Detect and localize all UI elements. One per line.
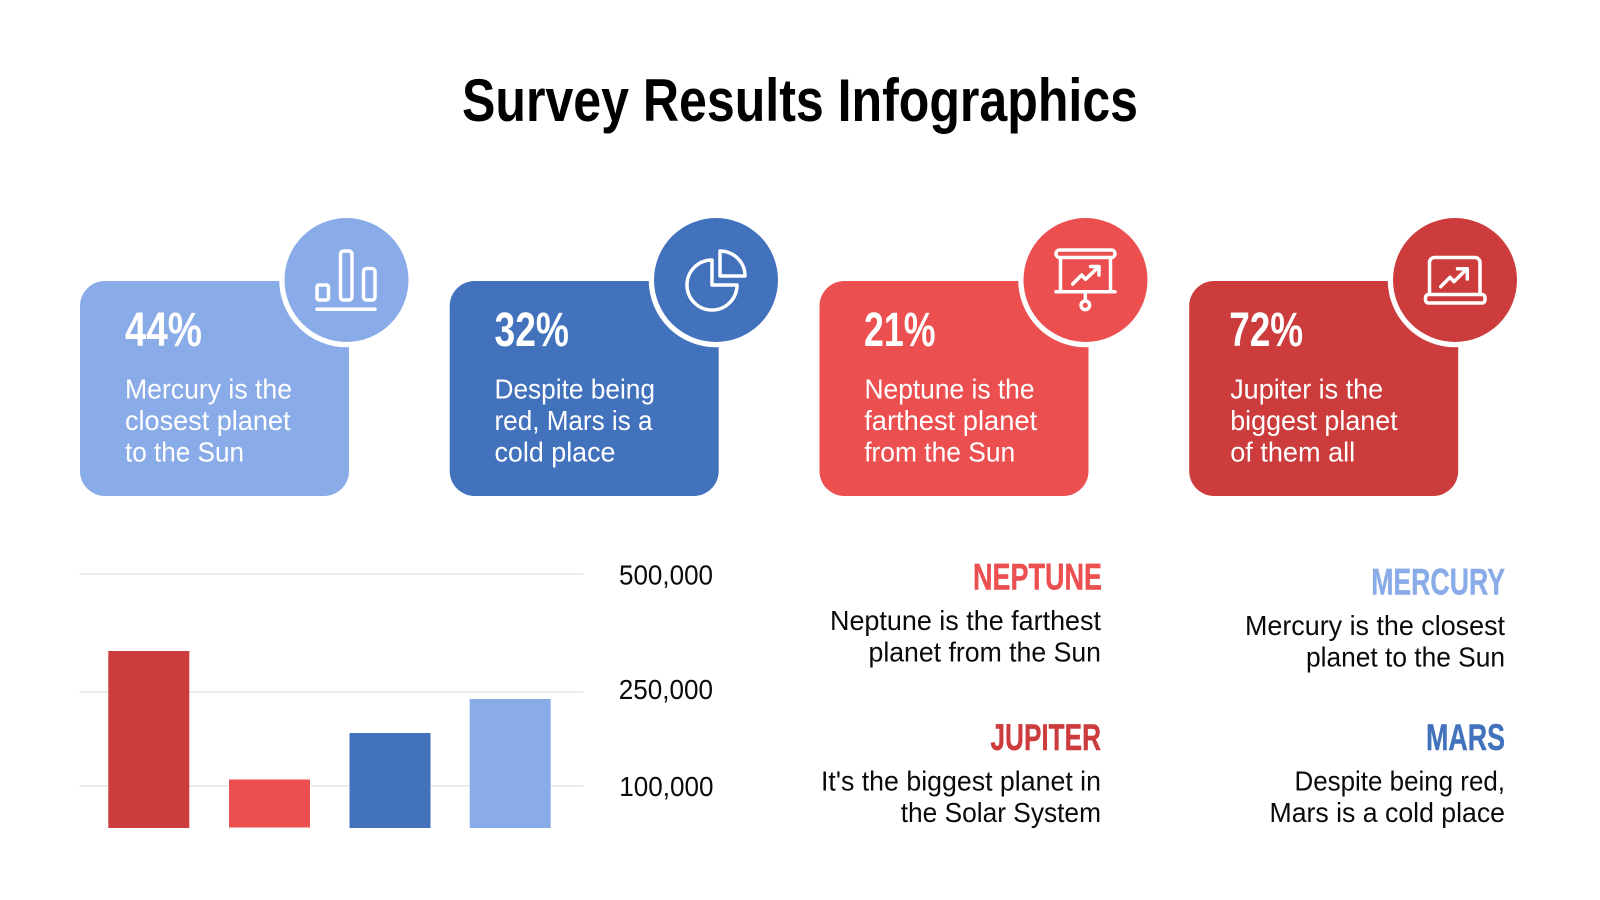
axis label 100,000: 100,000: [619, 771, 714, 802]
description: the Solar System: [901, 797, 1101, 828]
axis label 250,000: 250,000: [619, 674, 713, 705]
description: Mercury is the closest: [1245, 610, 1505, 641]
description: from the Sun: [864, 436, 1015, 468]
bar: Neptune: [229, 780, 310, 828]
legend block: Mercury: [1245, 562, 1505, 673]
heading: MARS: [1426, 717, 1505, 758]
description: [1245, 610, 1505, 673]
circle cut-out ring: [279, 213, 414, 347]
bar: Jupiter: [108, 651, 189, 828]
description: [864, 373, 1037, 468]
percentage: 72%: [1229, 304, 1303, 357]
heading: NEPTUNE: [973, 556, 1102, 598]
panel: Jupiter 72%: [1189, 213, 1522, 496]
legend block: Jupiter: [821, 717, 1101, 828]
icon badge: laptop: [1393, 218, 1517, 342]
description: [125, 373, 292, 468]
description: Despite being: [494, 373, 655, 404]
circle cut-out ring: [1388, 213, 1522, 347]
card background: [450, 281, 719, 496]
circle cut-out ring: [1018, 213, 1153, 347]
description: [1270, 765, 1505, 828]
description: Mars is a cold place: [1270, 797, 1505, 828]
description: Mercury is the: [125, 373, 292, 404]
title: Survey Results Infographics: [462, 67, 1138, 134]
icon badge: bar chart: [284, 218, 408, 342]
description: cold place: [494, 436, 616, 468]
card background: [1189, 281, 1458, 496]
circle cut-out ring: [649, 213, 783, 347]
heading: MERCURY: [1371, 562, 1505, 602]
description: biggest planet: [1230, 405, 1398, 436]
description: [830, 605, 1101, 668]
axis label 500,000: 500,000: [619, 560, 713, 590]
icon badge: pie chart: [654, 218, 778, 342]
description: to the Sun: [125, 436, 244, 468]
panel: Mercury 44%: [80, 213, 414, 496]
description: Neptune is the farthest: [830, 605, 1101, 636]
description: farthest planet: [864, 405, 1037, 436]
description: planet from the Sun: [868, 637, 1101, 668]
panel: Neptune 21%: [820, 213, 1153, 496]
bar: Mercury: [470, 699, 551, 828]
description: red, Mars is a: [494, 405, 653, 436]
card background: [820, 281, 1088, 496]
description: Jupiter is the: [1230, 373, 1383, 404]
description: [1230, 373, 1398, 468]
description: [494, 373, 655, 468]
description: closest planet: [125, 405, 291, 436]
bar chart: [80, 560, 714, 828]
card background: [80, 281, 349, 496]
percentage: 32%: [494, 304, 569, 357]
description: planet to the Sun: [1306, 642, 1505, 673]
legend block: Neptune: [830, 556, 1102, 668]
description: of them all: [1230, 436, 1355, 468]
legend block: Mars: [1270, 717, 1505, 828]
panel: Mars 32%: [450, 213, 783, 496]
percentage: 21%: [864, 304, 936, 357]
percentage: 44%: [125, 304, 202, 357]
description: Despite being red,: [1294, 765, 1505, 796]
description: It's the biggest planet in: [821, 765, 1101, 796]
icon badge: presentation board: [1024, 218, 1148, 342]
bar: Mars: [350, 733, 430, 828]
description: Neptune is the: [864, 373, 1034, 404]
heading: JUPITER: [990, 717, 1101, 758]
description: [821, 765, 1101, 828]
